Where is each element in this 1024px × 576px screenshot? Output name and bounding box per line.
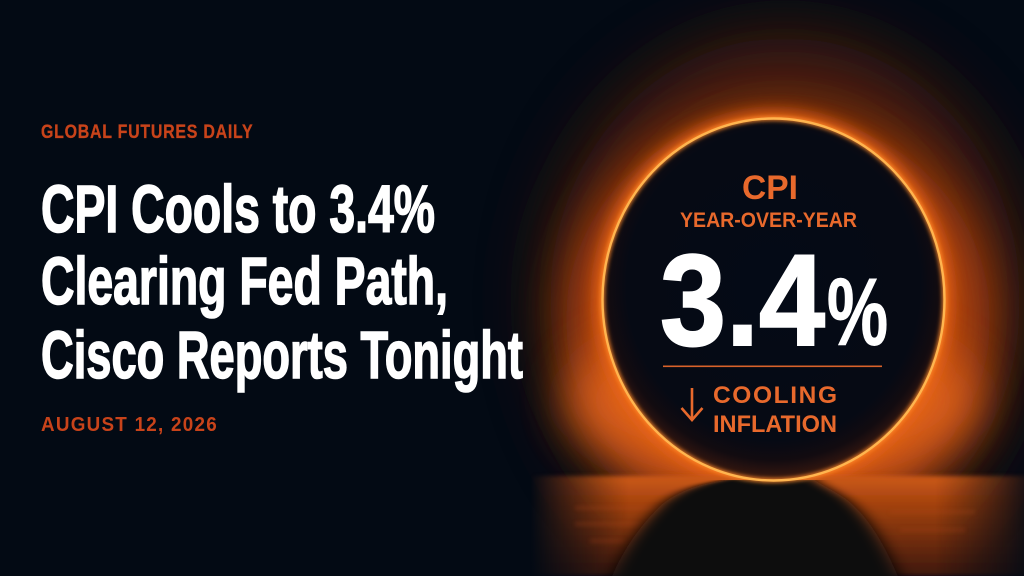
reflective floor with shadow (480, 476, 1024, 576)
date: AUGUST 12, 2026 (41, 413, 217, 436)
headline (41, 172, 523, 393)
glowing circle (602, 118, 944, 480)
divider (663, 366, 882, 367)
headline line 1: CPI Cools to 3.4% (41, 172, 435, 247)
kicker: publication name: GLOBAL FUTURES DAILY (41, 121, 253, 142)
headline line 3: Cisco Reports Tonight (41, 318, 523, 393)
status: cooling inflation (713, 382, 837, 438)
status: cooling inflation: INFLATION (713, 411, 837, 438)
circle label: CPI: CPI (742, 169, 798, 207)
headline line 2: Clearing Fed Path, (41, 244, 448, 319)
circle label: year-over-year: YEAR-OVER-YEAR (680, 208, 857, 232)
big number: 3.4%: % (827, 259, 888, 366)
orange halo glow (550, 38, 1020, 562)
status: cooling inflation: COOLING (713, 382, 837, 409)
big number: 3.4%: 3.4 (660, 227, 825, 373)
icon: down arrow (682, 388, 702, 420)
